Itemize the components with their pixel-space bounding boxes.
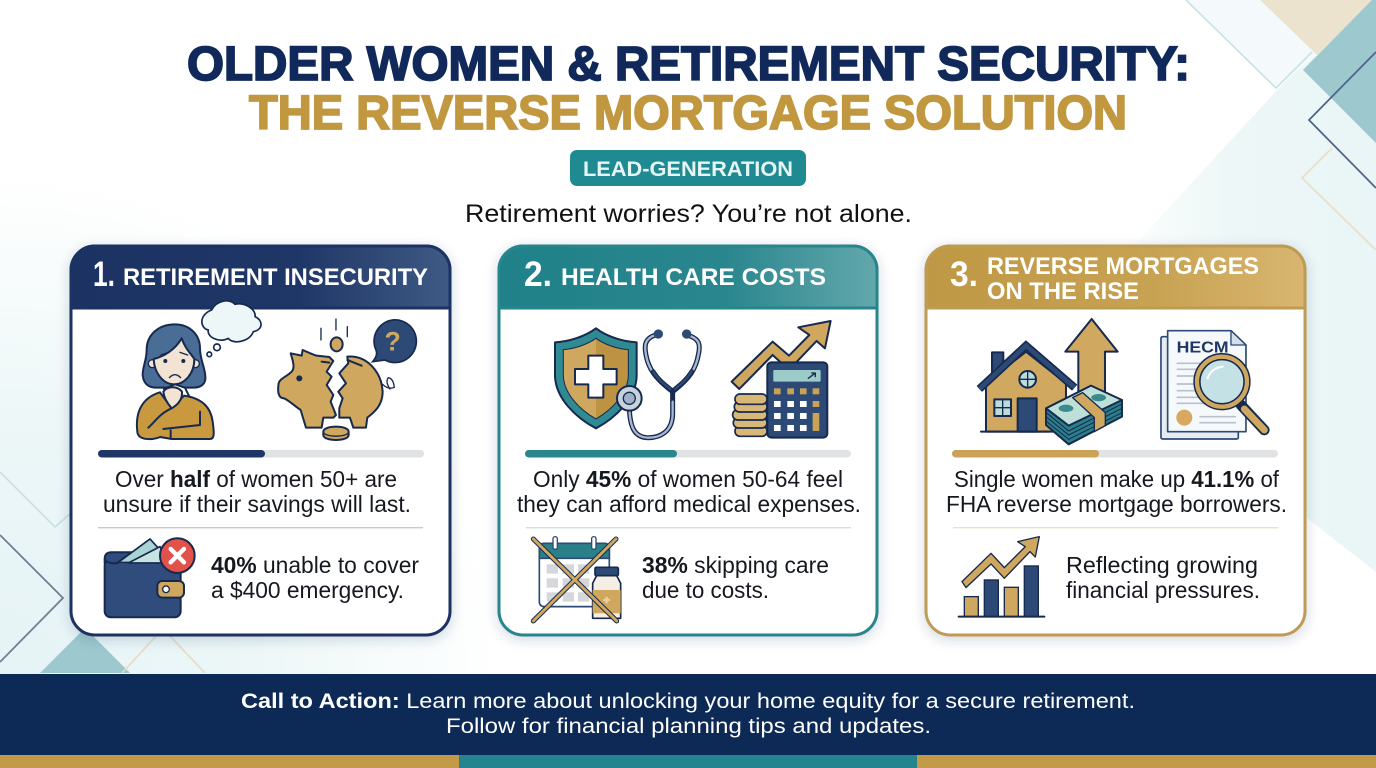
icon: house, up arrow and money bbox=[979, 319, 1122, 444]
footer color strip bbox=[0, 755, 1376, 768]
progress bar 1 bbox=[98, 450, 424, 458]
panel header 3: REVERSE MORTGAGES bbox=[987, 253, 1259, 280]
stat: 38% bbox=[642, 552, 829, 603]
panel: reverse mortgages on the rise bbox=[926, 246, 1305, 635]
panel header 1: 1. bbox=[93, 255, 115, 294]
subtitle: Retirement worries? You’re not alone. bbox=[465, 200, 912, 228]
stat: over half bbox=[103, 466, 411, 517]
progress bar 2 bbox=[525, 450, 851, 458]
stat: 45%: they can afford medical expenses. bbox=[517, 491, 861, 517]
icon: HECM document with magnifier: HECM bbox=[1177, 339, 1229, 356]
icon: crossed-out calendar and medicine bbox=[533, 537, 621, 621]
icon: growth bar chart bbox=[959, 537, 1044, 617]
title: OLDER WOMEN & RETIREMENT SECURITY: bbox=[187, 38, 1190, 91]
stat: 40% bbox=[211, 552, 419, 603]
stat: 41.1%: Single women make up 41.1% of bbox=[954, 466, 1280, 492]
icon: empty wallet with x bbox=[105, 538, 195, 617]
stat: 45% bbox=[517, 466, 861, 517]
panel: health care costs bbox=[499, 246, 877, 635]
panel header 3: ON THE RISE bbox=[987, 278, 1139, 305]
icon: shield with stethoscope bbox=[555, 328, 699, 438]
panel header 2 bbox=[499, 246, 877, 308]
stat: 40%: 40% unable to cover bbox=[211, 552, 419, 578]
panel header 2: HEALTH CARE COSTS bbox=[561, 264, 826, 291]
icon: worried woman with thought cloud bbox=[137, 301, 261, 439]
panel header 2: 2. bbox=[524, 255, 552, 294]
stat: growing financial pressures: financial pressures. bbox=[1066, 577, 1260, 603]
badge: lead-generation bbox=[570, 150, 806, 186]
panel header 1: RETIREMENT INSECURITY bbox=[123, 264, 428, 291]
icon: rising arrow, calculator and coins bbox=[732, 321, 831, 438]
title: THE REVERSE MORTGAGE SOLUTION bbox=[249, 87, 1127, 140]
stat: growing financial pressures bbox=[1066, 552, 1260, 603]
stat: 38%: due to costs. bbox=[642, 577, 769, 603]
panel header 3: 3. bbox=[950, 255, 978, 294]
progress bar 3 bbox=[952, 450, 1278, 458]
stat: 40%: a $400 emergency. bbox=[211, 577, 404, 603]
panel header 1 bbox=[71, 246, 450, 308]
call to action banner bbox=[0, 674, 1376, 755]
stat: 45%: Only 45% of women 50-64 feel bbox=[533, 466, 843, 492]
call to action banner: Follow for financial planning tips and updates. bbox=[446, 714, 931, 738]
stat: growing financial pressures: Reflecting growing bbox=[1066, 552, 1258, 578]
call to action banner: Call to Action: Learn more about unlocking your home equity for a secure retirement. bbox=[241, 689, 1135, 713]
stat: 41.1%: FHA reverse mortgage borrowers. bbox=[946, 491, 1287, 517]
icon: HECM document with magnifier bbox=[1161, 331, 1264, 439]
icon: broken piggy bank with question mark: ? bbox=[384, 327, 401, 357]
icon: broken piggy bank with question mark bbox=[278, 319, 416, 440]
stat: 38%: 38% skipping care bbox=[642, 552, 829, 578]
stat: 41.1% bbox=[946, 466, 1287, 517]
panel: retirement insecurity bbox=[71, 246, 450, 635]
stat: over half: unsure if their savings will last. bbox=[103, 491, 411, 517]
title bbox=[187, 38, 1190, 140]
panel header 3 bbox=[926, 246, 1305, 308]
stat: over half: Over half of women 50+ are bbox=[115, 466, 397, 492]
badge: lead-generation: LEAD-GENERATION bbox=[583, 158, 793, 181]
